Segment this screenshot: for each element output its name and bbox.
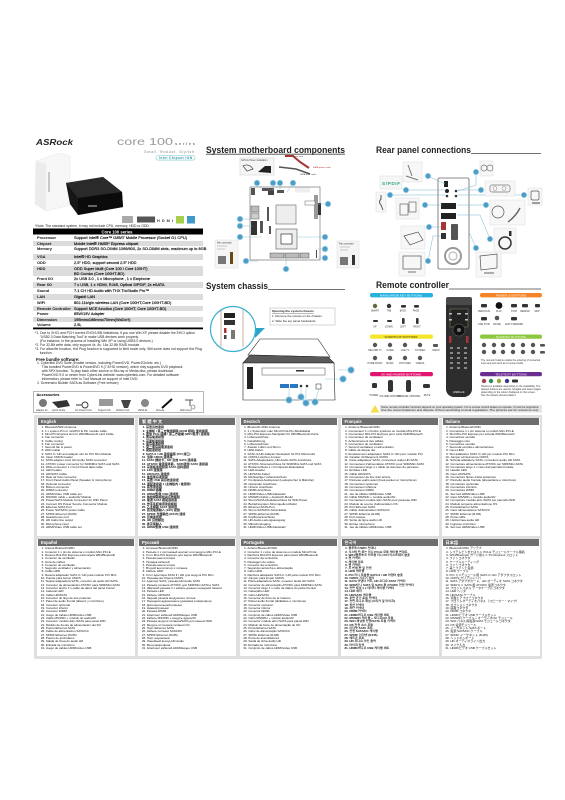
- spec row: rear IO: [33, 282, 203, 288]
- leader lines: rear panel: [390, 172, 524, 261]
- spec row: VGA: VGA: [37, 254, 45, 258]
- playback icons: ONE STOP: [478, 324, 490, 326]
- bundle text: 1. Cyberlink DVD Suite (Enable version, including PowerDVD, Power2Go/etc. etc.) This bundled PowerDVD is PowerDVD 9 (7.8 HD version), which only supports DVD playback with SPX function. To play back other source or Blu-ray or Media disc, please download PowerDVD 9.0 or newer from CyberLink website: www.cyberlink.com. For detailed software information, please refer to Tool Manual on support of Intel DVD. 2. Screensho Builder SATA as Software (Free version): [37, 361, 182, 385]
- spec row: VGA: [33, 254, 203, 260]
- product photo: black PC: [66, 177, 123, 215]
- spec row: rear IO: Rear I/O: [37, 282, 52, 286]
- accessories box: Quick Guide: [52, 409, 66, 412]
- spec row: sound: [37, 288, 149, 292]
- inset: ribbon cable: Attach here: [292, 155, 304, 158]
- series title: series: [175, 141, 196, 146]
- spec row: volume: Volume: [37, 322, 51, 327]
- spec row: ODD: [37, 260, 136, 266]
- teletext note: Teletext is available depending on the availability. The: [481, 385, 541, 388]
- spec row: WiFi: [37, 300, 172, 306]
- warning band: Some remote controller functions depend on your operating system. For a remote control feature to operate, it must be supported.: [381, 406, 539, 409]
- manual cell: Spanish: Español: [41, 540, 57, 545]
- AV and power icons: VOLUME UP/DOWN: [379, 396, 401, 398]
- manual cell: Traditional Chinese: 1. 前置音效連接 2. 主機板 / 第三方無線網路 (BCM 模組) 連接插座 3. 迷你 PCIe 插槽 / 第三方插槽 (WiFi/藍牙) 連接座 4. 風扇電源接頭 5. 前面板連接器 6. 風扇電源接頭 7. 第二風扇與電源連接 8. 硬碟連接埠 9. SATA II / HD 連接插座 (PCI 接口) 10. 清除 CMOS 連接座 11. SATA 轉接卡，HD 音效 SATA 連接器 12. ATX/DC 電源連接器，SDR/迷你 SATA 連接器 13. 前面板連接線與 SATA 資料連接 14. LED 連接座 15. HD/SATA 連接線 16. 後置風扇連接座 17. 前置 USB 與音效連接埠 18. 選配連接器 1 (主機板內 / 電源線) 19. 底部連接器 20. DIMM 插槽 21. HDMI/影像 USB 連接線 22. 無線網路模組與音效模組 23. 電源 SATA 模組連接座 24. 作業系統電源連接模組 25. 乙太網路 SATA 連接埠 26. 直流電源輸入 (19V) 接頭 27. SPDIF 光纖輸出 (RJ45) 連接 28. 耳機連接埠 29. HD 音效輸出 30. 麥克風輸入 31. HDMI/影像 USB 連接線: [141, 425, 210, 529]
- manual cell: Traditional Chinese: [138, 418, 236, 536]
- numeric note: input and text input at on-screen fields.: [481, 362, 524, 365]
- manual cell: Italian: Italiano: [446, 419, 460, 424]
- spec row: HDD: ODD Super Multi (Core 100 / Core 100HT) BD Combo (Core 100HT-BD): [74, 266, 148, 276]
- manual cell: German: Deutsch: [244, 419, 260, 424]
- numeric note: [481, 359, 541, 365]
- teletext colored buttons: [482, 379, 518, 383]
- AV and power icons: MUTE: [424, 395, 431, 397]
- teletext note: depending on the colour displayed on the screen.: [481, 391, 536, 394]
- spec row: ODD: ODD: [37, 260, 46, 264]
- heading: rear panel: Rear panel connections: [376, 145, 471, 156]
- inset: power cable instructions: SATA & Power installation: [241, 159, 268, 162]
- heading: chassis: System chassis: [206, 281, 268, 292]
- warning band: [370, 405, 542, 412]
- manual cell: French: Français: [344, 419, 362, 424]
- manual cell: Japanese: 1. Bluetooth/WiFi アンテナ 2. システムピンまたはミニ PCI-E モジュールケーブル接続 3. WiFi/Bluetooth カード用ミニ PCI Express スロット 4. ファンコネクタ 5. ケーブルルーティング 6. ファンコネクタ 7. 第二ファンと電源 8. HDD ケーブル 9. PCI ミニモジュール用 SATA II / HD アダプタスロット 10. CMOS クリアジャンパ 11. SATA アダプタカード、HD オーディオ SATA コネクタ 12. SDR/ミニ SATA 用 ATX/DC 電源コネクタ 13. フロントパネル データケーブルコネクタ 14. LED ヘッダ 15. HD/SATA ケーブル 16. 背面エアフローコネクタ 17. フロントオーディオパネル（スピーカー・マイク） 18. オプションコネクタ 19. 底面コネクタ 20. DIMM コネクタ 21. HDMI/ビデオ USB ケーブルセット 22. MS/WiFi ケーブル + オーディオ/AV モジュール 23. WiFi パネル用電源/SATA モジュールコネクタ 24. OS 電源モジュール 25. イーサネット SATA ポート 26. 電源 SATA/DC ケーブル 27. SPDIF イーサネット (RJ45) 28. ヘッドホンポート 29. HD オーディオライン出力 30. マイク入力 31. HDMI/ビデオ USB ケーブルセット: [444, 546, 525, 650]
- teletext note: [481, 385, 542, 397]
- spec row: HDD: [33, 266, 203, 276]
- spec table footer rule: [33, 328, 203, 329]
- series title: Small. Robust. Stylish: [144, 150, 194, 154]
- series title: [117, 137, 196, 154]
- AV and power icons: [370, 380, 431, 398]
- spec row: dimension: [33, 316, 203, 322]
- shortcut icons: HOME MUSIC: [368, 363, 383, 365]
- playback icons: PLAY: [496, 310, 502, 313]
- band: teletext buttons: TELETEXT BUTTONS: [495, 372, 527, 376]
- brand logo: ASRock: [35, 137, 74, 147]
- band: numeric buttons: [480, 334, 542, 339]
- spec row: WiFi: WiFi: [37, 300, 45, 304]
- spec note line: *Note: The standard system, it may not include CPU, memory, HDD or ODD.: [35, 224, 150, 228]
- callout numbers: chassis: [286, 367, 354, 406]
- manual cell: German: 1. Bluetooth-/WiFi-Antenne 2. 1 x Systempin oder Mini-PCI-E-Pin-Modulkabel 3. Mini-PCI-Express-Steckplatz für WiFi/Bluetooth-Karte 4. Lüfteranschluss 5. Kabelführung 6. Lüfteranschluss 7. Zweiter Lüfter und Strom 8. HDD-Kabel 9. SATA-II-/HD-Adapter-Steckplatz für PCI-Minimodul 10. CMOS-Löschen-Jumper 11. SATA-Adapterkarte, HD-Audio-SATA-Anschluss 12. ATX/DC-Stromanschluss für SDR/Mini-SATA und SATA 13. Breitanschluss 1 x Frontpanel-Datenkabel 14. LED-Header 15. HD/SATA-Kabel 16. Rückseitiger Lüfteranschluss 17. Frontpanel-Audiopanel (Lautsprecher & Mikrofon) 18. Optionaler Anschluss 19. Unterer Anschluss 20. DIMM-Anschluss 21. HDMI/Video-USB-Kabelsatz 22. MS/WiFi-Kabel + Audio/AV-Modul 23. Strom/SATA-Modulanschluss für WiFi-Panel 24. Betriebssystem-Stromquellen-Modul 25. Ethernet-SATA-Port 26. Strom-SATA/DC-Stromkabel 27. SPDIF-Ethernet (RJ45) 28. Kopfhöreranschluss 29. HD-Audio-Leitungsausgang 30. Mikrofoneingang 31. HDMI/Video-USB-Kabelsatz: [242, 425, 321, 529]
- spec row: memory: Memory: [37, 246, 52, 251]
- inset: power cable instructions: [240, 158, 274, 175]
- product photo: white PC: [35, 153, 70, 211]
- shortcut icons: RECORD TV: [368, 350, 382, 352]
- spec row: dimension: Dimension: [37, 316, 57, 322]
- navigation key icons: LEFT: [400, 326, 406, 328]
- rear peripheral: audio sockets: [485, 181, 515, 196]
- manual cell: Korean: [340, 539, 438, 656]
- spec table header band: Core 100 series: [102, 229, 133, 234]
- AV and power icons: CHANNEL UP/DOWN: [398, 395, 421, 398]
- inset: right fan connector: Fan connector: [339, 242, 354, 246]
- footnotes: *1. Due to XHCI and PCH current EHCI/USB limitations, if you use Win XP, please disable the EHCI option "USB2.0 Data Matching Tool" in make USB devices work properly. (For instance, in the process of installing Win XP or using USB3.0 devices.) *2. For 32-Bit write data, only support 4x, 8x, 16x 32-Bit RAID module. *3. For allow/fix function, Hot Plug function is supported to limit mode only. Still some does not support Hot Plug function.: [35, 331, 202, 355]
- spec row: sound: Sound: [37, 288, 49, 292]
- navigation key icons: RIGHT: [413, 326, 421, 328]
- manual cell: French: 1. Antenne Bluetooth/WiFi 2. Connecteur 1 x broche système ou module Mini-PCI-E 3. Connecteur Mini-PCI Express pour carte WiFi/Bluetooth 4. Connecteur de ventilateur 5. Acheminement des câbles 6. Connecteur de ventilateur 7. Second ventilateur et alimentation 8. Câble de disque dur 9. Emplacement adaptateur SATA II / HD pour module PCI 10. Cavalier d'effacement CMOS 11. Carte adaptateur SATA, connecteur audio HD SATA 12. Connecteur d'alimentation ATX/DC pour SDR/Mini-SATA 13. Connecteur large 1 x câble de données du panneau 14. Embase LED 15. Câble HD/SATA 16. Connecteur de flux d'air arrière 17. Panneau audio avant (haut-parleur et microphone) 18. Connecteur optionnel 19. Connecteur inférieur 20. Connecteur DIMM 21. Jeu de câbles HDMI/vidéo USB 22. Câble MS/WiFi + module audio/AV 23. Connecteur module alim./SATA pour panneau WiFi 24. Module de source d'alimentation OS 25. Port Ethernet SATA 26. Câble d'alimentation SATA/CC 27. SPDIF Ethernet (RJ45) 28. Port casque 29. Sortie de ligne audio HD 30. Entrée microphone 31. Jeu de câbles HDMI/vidéo USB: [344, 425, 424, 529]
- inset: left fan connector: [215, 240, 238, 268]
- spec row: LAN: [33, 294, 203, 300]
- spec row: WiFi: 802.11b/g/n wireless LAN (Core 100HT,Core 100HT-BD): [74, 300, 171, 304]
- band: AV and power: [370, 372, 433, 376]
- accessories box: Rubber Foot: [116, 409, 130, 412]
- spec row: remote: Remote Controller: [37, 306, 71, 310]
- spec row: chipset: Mobile Intel® HM55* Express chipset: [74, 240, 138, 246]
- rear peripheral: monitor right: [476, 252, 501, 277]
- navigation key icons: DOWN: [385, 326, 393, 328]
- band: AV and power: AV AND POWER BUTTONS: [381, 372, 421, 376]
- heading: chassis: [206, 281, 345, 292]
- shortcut icons: [368, 343, 440, 365]
- remote control illustration: [446, 297, 472, 397]
- bundle heading: Free bundle software:: [36, 356, 80, 362]
- navigation key icons: PAGE: [413, 310, 420, 312]
- instruction box: opening chassis: Opening the system chassis: [272, 309, 314, 313]
- spec row: chipset: [33, 240, 203, 246]
- AV and power icons: POWER: [370, 395, 379, 397]
- navigation key icons: [371, 304, 421, 328]
- accessories box: Support CD: [98, 409, 111, 412]
- rear peripheral: external drive: [401, 226, 425, 249]
- shortcut icons: TV/VIDEO: [415, 350, 426, 352]
- spec row: power: [37, 311, 105, 316]
- navigation key icons: BACK: [400, 310, 407, 312]
- spec row: volume: [37, 322, 82, 327]
- manual cell: Portuguese: Português: [244, 540, 264, 545]
- remote control illustration: ASRock: [453, 390, 465, 394]
- spec row: front IO: 2x USB 3.0 , 1 x Microphone , 1 x Earphone: [74, 276, 150, 280]
- inset: ribbon cable: [279, 155, 331, 176]
- spec table header band: [33, 228, 203, 234]
- certification logos: [122, 216, 195, 224]
- band: navigation keys: [370, 293, 433, 298]
- manual cell: Traditional Chinese: 繁 體 中 文: [142, 419, 162, 424]
- manual panel backdrop: [34, 415, 542, 659]
- inset: ribbon cable: SATA power cable: [313, 166, 331, 169]
- shortcut icons: LIVE TV: [401, 350, 410, 352]
- spec row: ODD: 2.5" HDD, support second 2.5" HDD: [74, 260, 136, 264]
- instruction box: opening chassis: 1. Remove the screws on the chassis.: [272, 314, 323, 318]
- spec row: LAN: LAN: [37, 294, 45, 298]
- accessories box: Accessories: [36, 392, 59, 397]
- navigation key icons: TAB: [387, 310, 392, 312]
- band: shortcut buttons: [370, 334, 433, 339]
- accessories box: VESA kit: [138, 409, 148, 412]
- spec row: HDD: HDD: [37, 266, 45, 270]
- manual cell: Italian: 1. Antenna Bluetooth/WiFi 2. Connettore 1 x pin sistema o modulo Mini-PCI-E 3. Slot Mini-PCI Express per scheda WiFi/Bluetooth 4. Connettore ventola 5. Passaggio cavi 6. Connettore ventola 7. Seconda ventola e alimentazione 8. Cavo HDD 9. Slot adattatore SATA II / HD per modulo PCI Mini 10. Jumper azzeramento CMOS 11. Scheda adattatore SATA, connettore audio HD SATA 12. Connettore alimentazione ATX/DC per SDR/Mini-SATA 13. Connettore largo 1 x cavo dati pannello frontale 14. Header LED 15. Cavo HD/SATA 16. Connettore flusso d'aria posteriore 17. Pannello audio frontale (altoparlante e microfono) 18. Connettore opzionale 19. Connettore inferiore 20. Connettore DIMM 21. Set cavi HDMI/video USB 22. Cavo MS/WiFi + modulo audio/AV 23. Connettore modulo alim./SATA per pannello WiFi 24. Modulo sorgente alimentazione OS 25. Porta Ethernet SATA 26. Cavo alimentazione SATA/CC 27. SPDIF Ethernet (RJ45) 28. Porta cuffie 29. Uscita linea audio HD 30. Ingresso microfono 31. Set cavi HDMI/video USB: [444, 425, 523, 529]
- spec row: sound: 7.1 CH HD Audio with THX TruStudio Pro™: [74, 288, 149, 292]
- certification logos: HDMI: [157, 219, 173, 223]
- numeric button icons: [482, 343, 545, 354]
- instruction box: opening chassis: [270, 308, 335, 325]
- playback icons: SKIP: [534, 311, 540, 313]
- heading: remote: Remote controller: [376, 280, 449, 291]
- navigation key icons: UP: [373, 326, 377, 328]
- leader lines: chassis: [289, 370, 351, 403]
- series title: core 100: [117, 137, 174, 148]
- rear peripheral: S/PDIF label: S/PDIF: [382, 181, 400, 186]
- spec row: dimension: 195mmx186mmx70mm(WxDxH): [74, 316, 130, 322]
- rear peripheral: headphones: [480, 161, 493, 176]
- spec row: LAN: Gigabit LAN: [74, 294, 95, 298]
- accessories box: [34, 392, 204, 412]
- playback icons: STOP: [511, 311, 518, 313]
- badge: Intel Chipset ION: [159, 156, 193, 160]
- spec row: front IO: Front I/O: [37, 276, 53, 280]
- spec row: rear IO: 7 x USB, 1 x HDMI, RJ45, Optical S/PDIF, 2x eSATA: [74, 282, 164, 286]
- spec row: chipset: Chipset: [37, 240, 51, 246]
- accessories box: Adapter kit: [36, 409, 48, 412]
- rear peripheral: USB cable: [490, 200, 525, 225]
- shortcut icons: GUIDE: [386, 350, 394, 352]
- manual cell: Korean: 1. 블루투스/WiFi 안테나 2. 시스템 핀 또는 미니 PCI-E 모듈 케이블 연결부 3. WiFi/블루투스 카드용 미니 PCI 익스프레스 슬롯 4. 팬 커넥터 5. 케이블 경로 6. 팬 커넥터 7. 두 번째 팬 및 전원 8. HDD 케이블 9. PCI 미니 모듈용 SATA II / HD 어댑터 슬롯 10. CMOS 지우기 점퍼 11. SATA 어댑터 카드, HD 오디오 SATA 커넥터 12. SDR/미니 SATA 및 SATA 용 ATX/DC 전원 커넥터 13. 전면 패널 1 x 데이터 케이블 커넥터 14. LED 헤더 15. HD/SATA 케이블 16. 후면 공기 흐름 커넥터 17. 전면 오디오 패널 (스피커 및 마이크) 18. 옵션 커넥터 19. 하단 커넥터 20. DIMM 커넥터 21. HDMI/비디오 USB 케이블 세트 22. MS/WiFi 케이블 + 오디오/AV 모듈 23. WiFi 패널용 전원/SATA 모듈 커넥터 24. OS 전원 소스 모듈 25. 이더넷 SATA 포트 26. 전원 SATA/DC 케이블 27. SPDIF 이더넷 (RJ45) 28. 헤드폰 포트 29. HD 오디오 라인 출력 30. 마이크 입력 31. HDMI/비디오 USB 케이블 세트: [344, 546, 414, 650]
- spec row: volume: 2.5L: [74, 322, 82, 327]
- manual cell: English: English: [41, 419, 56, 424]
- leader lines: motherboard: [240, 183, 328, 265]
- accessories box: AC Power Cord: [75, 409, 92, 412]
- manual cell: Russian: 1. Антенна Bluetooth/WiFi 2. Разъём 1 x системный контакт или модуль Mini-PCI-E 3. Слот Mini-PCI Express для карты WiFi/Bluetooth 4. Разъём вентилятора 5. Укладка кабелей 6. Разъём вентилятора 7. Второй вентилятор и питание 8. Кабель HDD 9. Слот адаптера SATA II / HD для модуля PCI Mini 10. Перемычка сброса CMOS 11. Адаптер SATA, разъём HD Audio SATA 12. Разъём питания ATX/DC для SDR/Mini-SATA и SATA 13. Широкий разъём 1 x кабель данных передней панели 14. Разъём LED 15. Кабель HD/SATA 16. Задний разъём воздушного потока 17. Передняя аудиопанель (динамик и микрофон) 18. Дополнительный разъём 19. Нижний разъём 20. Разъём DIMM 21. Комплект кабелей HDMI/видео USB 22. Кабель MS/WiFi + модуль аудио/AV 23. Разъём модуля питания/SATA для панели WiFi 24. Модуль источника питания ОС 25. Порт Ethernet SATA 26. Кабель питания SATA/DC 27. SPDIF Ethernet (RJ45) 28. Порт наушников 29. Линейный выход HD Audio 30. Вход микрофона 31. Комплект кабелей HDMI/видео USB: [141, 546, 222, 650]
- shortcut icons: RADIO: [432, 349, 440, 352]
- accessories box: Remote: [156, 409, 165, 412]
- magnifier detail: [210, 306, 265, 352]
- band: shortcut buttons: SHORTCUT BUTTONS: [385, 335, 417, 339]
- rear peripheral: laptop: [403, 162, 422, 182]
- inset: left fan connector: Fan connector: [217, 242, 232, 244]
- spec row: processor: [37, 235, 187, 240]
- teletext note: teletext buttons are used to navigate and select pages: [481, 388, 542, 391]
- rear peripheral: router: [528, 188, 542, 205]
- spec row: processor: Support Intel® Core™ i3/i5/i7 Mobile Processor (Socket G1 CPU): [74, 235, 187, 240]
- inset: ribbon cable: SATA data cable: [300, 173, 317, 176]
- rear peripheral: HDMI cable: [494, 228, 516, 253]
- chassis illustration: [243, 339, 335, 400]
- manual cell: Japanese: 日本語: [446, 540, 458, 545]
- band: navigation keys: NAVIGATION KEY BUTTONS: [380, 294, 422, 298]
- warning band: Use the correct batteries and dispose of them according to local regulations. The pictures are for reference only.: [381, 409, 539, 412]
- playback icons: REWIND: [520, 311, 530, 313]
- shortcut icons: VIDEOS: [416, 363, 425, 365]
- teletext note: See the teletext documentation.: [481, 394, 516, 397]
- spec row: processor: Processor: [37, 235, 56, 240]
- playback icons: PAUSE: [493, 323, 501, 326]
- playback icons: FAST FORWARD: [505, 323, 523, 326]
- band: power buttons: [480, 293, 542, 298]
- manual cell: Portuguese: 1. Antena Bluetooth/WiFi 2. Conector 1 x pino de sistema ou módulo Mini-PCI-E 3. Ranhura Mini-PCI Express para placa WiFi/Bluetooth 4. Conector da ventoinha 5. Passagem de cabos 6. Conector da ventoinha 7. Segunda ventoinha e alimentação 8. Cabo HDD 9. Ranhura adaptador SATA II / HD para módulo PCI Mini 10. Jumper para limpar CMOS 11. Placa adaptadora SATA, conector áudio HD SATA 12. Conector de alimentação ATX/DC para SDR/Mini-SATA 13. Conector largo 1 x cabo de dados do painel frontal 14. Cabeçalho LED 15. Cabo HD/SATA 16. Conector de fluxo de ar traseiro 17. Painel áudio frontal (altifalante e microfone) 18. Conector opcional 19. Conector inferior 20. Conector DIMM 21. Conjunto de cabos HDMI/vídeo USB 22. Cabo MS/WiFi + módulo áudio/AV 23. Conector módulo alim./SATA para painel WiFi 24. Módulo de fonte de alimentação do SO 25. Porta Ethernet SATA 26. Cabo de alimentação SATA/CC 27. SPDIF Ethernet (RJ45) 28. Porta de auscultadores 29. Saída de linha áudio HD 30. Entrada de microfone 31. Conjunto de cabos HDMI/vídeo USB: [242, 546, 322, 650]
- manual cell: Spanish: 1. Antena Bluetooth/WiFi 2. Conector 1 x pin de sistema o módulo Mini-PCI-E 3. Ranura Mini-PCI Express para tarjeta WiFi/Bluetooth 4. Conector de ventilador 5. Guía de cables 6. Conector de ventilador 7. Segundo ventilador y alimentación 8. Cable HDD 9. Ranura adaptador SATA II / HD para módulo PCI Mini 10. Puente para borrar CMOS 11. Tarjeta adaptadora SATA, conector de audio HD SATA 12. Conector de alimentación ATX/DC para SDR/Mini-SATA 13. Conector ancho 1 x cable de datos del panel frontal 14. Cabezal LED 15. Cable HD/SATA 16. Conector de flujo de aire posterior 17. Panel de audio frontal (altavoz y micrófono) 18. Conector opcional 19. Conector inferior 20. Conector DIMM 21. Juego de cables HDMI/vídeo USB 22. Cable MS/WiFi + módulo de audio/AV 23. Conector módulo alim./SATA para panel WiFi 24. Módulo de fuente de alimentación del SO 25. Puerto Ethernet SATA 26. Cable de alimentación SATA/CC 27. SPDIF Ethernet (RJ45) 28. Puerto de auriculares 29. Salida de línea de audio HD 30. Entrada de micrófono 31. Juego de cables HDMI/vídeo USB: [40, 546, 120, 650]
- manual cell: English: 1. Bluetooth/WiFi Antenna 2. 1 x system Pin or mini/PCI E Pin module cable 3. Mini-PCI Express slot for WiFi/Bluetooth card Cable 4. Fan connector 5. Cable routing 6. Fan connector 7. Second fan & power 8. HDD Cable 9. SATA II / HD and adapter slot for PCI Mini Module 10. Clear CMOS header 11. SATA adapter card, HD Audio SATA connector 12. ATX/DC power connector for SDR/Mini SATA and SATA 13. Wide-connector 1 x Front Panel data cable 14. LED header 15. HD/SATA Cable 16. Rear air flow connector 17. Front Panel Audio Panel (Speaker & microphone) 18. Optional connector 19. Bottom connector 20. DIMM connector 21. HDMI/Video USB cable set 22. MS/WiFi cable + audio/AV Module 23. Power/SATA Module Connector for WiFi Panel 24. Connect OS Power Source Connector Module 25. Ethernet SATA Port 26. Power SATA/DC power cable 27. SPDIF Ethernet (RJ45) 28. Headphones port 29. HD Audio line output 30. Microphone input 31. HDMI/Video USB cable set: [40, 425, 119, 529]
- rear panel illustration: [438, 178, 469, 269]
- accessories box: Wall mount: [180, 409, 192, 412]
- rear peripheral: speakers: [396, 198, 419, 219]
- spec row: remote: [33, 306, 203, 311]
- shortcut icons: MUSIC: [386, 363, 394, 365]
- motherboard diagram: [250, 187, 321, 260]
- callout numbers: rear panel: [387, 169, 527, 264]
- spec row: front IO: [37, 276, 150, 282]
- band: numeric buttons: NUMERIC BUTTONS: [496, 335, 526, 339]
- playback icons: PREVIOUS: [478, 311, 490, 313]
- heading: motherboard: System motherboard components: [206, 145, 345, 156]
- rear peripheral: S/PDIF label: [380, 176, 402, 189]
- manual cell: Korean: 한국어: [344, 540, 356, 545]
- spec row: VGA: Intel® HD Graphics: [74, 254, 108, 258]
- inset: right fan connector: [337, 241, 359, 268]
- shortcut icons: PICTURES: [399, 363, 411, 365]
- instruction box: opening chassis: 2. Slide the top panel backwards.: [272, 319, 316, 323]
- spec table: [33, 235, 206, 327]
- spec row: remote: Support MCE function (Core 100HT, Core 100HT-BD): [74, 306, 166, 310]
- manual cell: Russian: Русский: [142, 540, 159, 545]
- navigation key icons: SMART: [371, 310, 380, 312]
- spec row: power: 65W/19V Adapter: [74, 311, 104, 316]
- numeric note: The numeric buttons enable the entering of numerical: [481, 359, 541, 362]
- playback icons: [478, 302, 540, 326]
- rear peripheral: power plug: [376, 192, 386, 212]
- band: teletext buttons: [480, 372, 542, 376]
- rear peripheral: monitor left: [399, 252, 425, 276]
- callout numbers: motherboard: [237, 180, 331, 272]
- band: power buttons: POWER & BUTTONS: [496, 294, 526, 298]
- spec row: power: Power: [37, 311, 49, 316]
- spec row: memory: Support DDR3 SO-DIMM 1066/800, 2x SO-DIMM slots, maximum up to 8GB: [74, 246, 206, 251]
